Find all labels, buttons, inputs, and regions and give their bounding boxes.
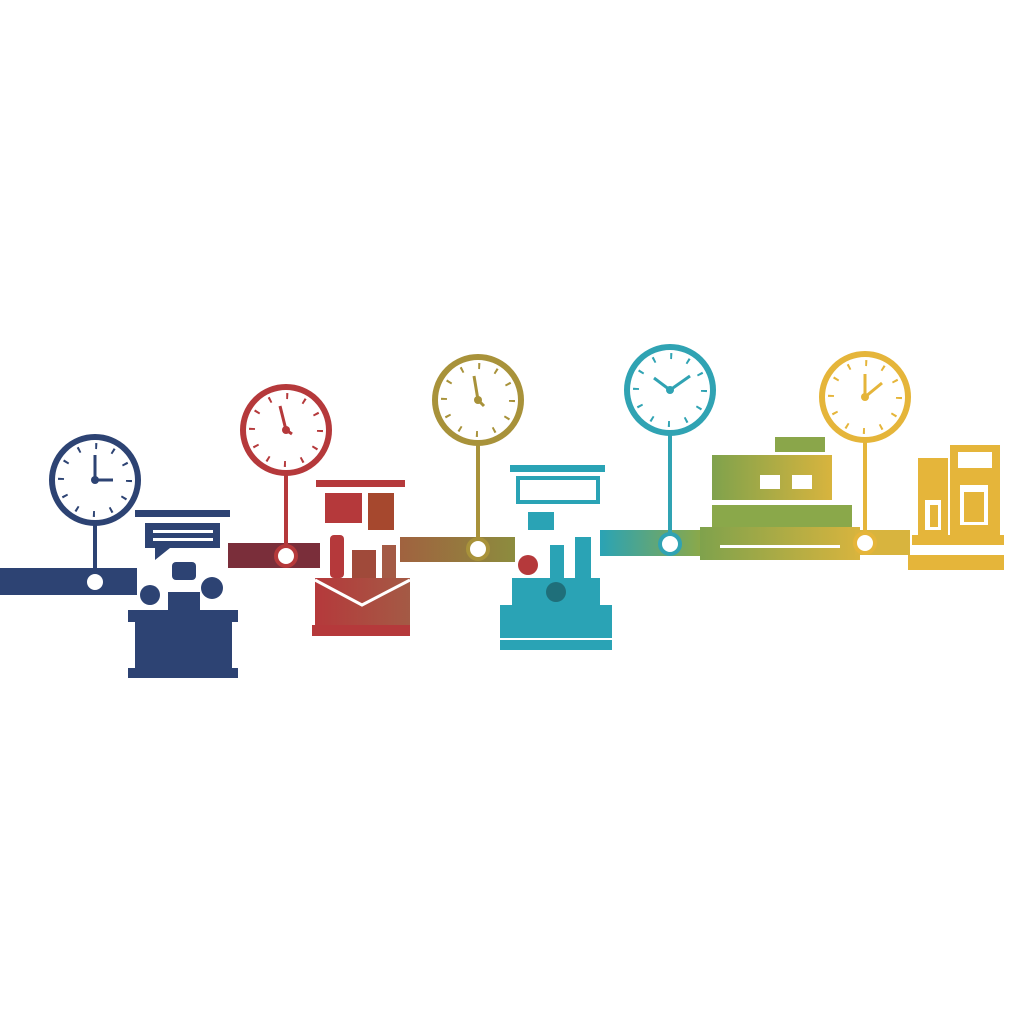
stall 4 xyxy=(700,437,860,560)
clock 4 xyxy=(627,347,713,554)
clock 3 xyxy=(435,357,521,559)
timeline segment 3 xyxy=(400,537,515,562)
timeline segment 2 xyxy=(228,543,320,568)
timeline segment 4 xyxy=(600,530,700,556)
stall 2 xyxy=(312,480,410,636)
timeline segment 5 xyxy=(855,530,910,555)
clock 5 xyxy=(822,354,908,553)
clock 1 xyxy=(52,437,138,592)
stall 5 xyxy=(908,445,1004,570)
stall 3 xyxy=(500,465,612,650)
timeline segment 1 xyxy=(0,568,137,595)
clock 2 xyxy=(243,387,329,566)
stall 1 xyxy=(128,510,238,678)
